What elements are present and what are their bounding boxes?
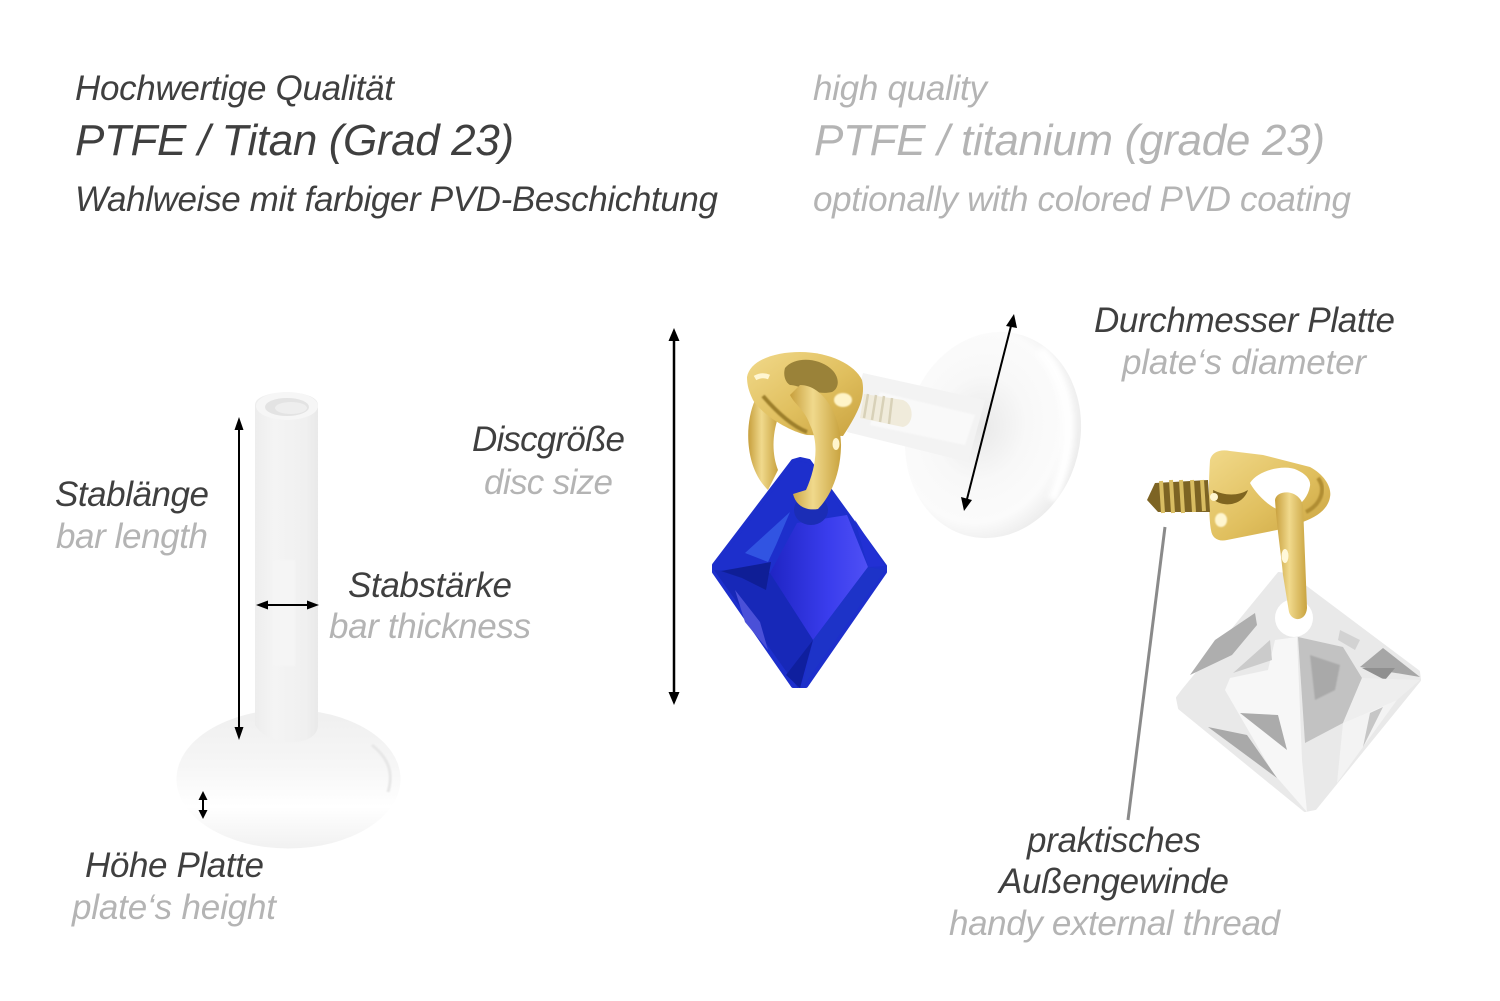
clear gem [1178, 574, 1419, 810]
label: plate diameter: Durchmesser Platte [1094, 301, 1395, 340]
label: bar thickness: Stabstärke [348, 566, 512, 605]
clear bar [847, 373, 985, 462]
label: bar length [55, 475, 209, 556]
arrow: plate diameter [961, 314, 1017, 511]
label: bar thickness: bar thickness [329, 607, 531, 646]
label: external thread: Außengewinde [997, 862, 1229, 901]
inner thread [860, 394, 912, 427]
back ring [748, 400, 778, 490]
label: external thread [949, 821, 1282, 943]
thread [1147, 480, 1210, 512]
leader line: external thread [1128, 527, 1165, 820]
heading: English: optionally with colored PVD coating [813, 180, 1352, 219]
arrow: bar thickness [256, 600, 319, 610]
label: plate height: Höhe Platte [85, 846, 264, 885]
product: assembled labret with blue gem [714, 313, 1103, 688]
disc [883, 313, 1103, 557]
link [1275, 492, 1307, 619]
arrow: disc size [668, 328, 680, 705]
label: disc size: disc size [484, 463, 613, 502]
gold head [747, 352, 863, 436]
gold head [1209, 450, 1330, 541]
product: disc base with bar [176, 392, 400, 848]
arrow: bar length [234, 417, 244, 740]
heading: German: Hochwertige Qualität [75, 69, 395, 108]
arrow: plate height [198, 791, 208, 819]
label: disc size [472, 420, 625, 502]
label: external thread: handy external thread [949, 904, 1282, 943]
label: bar length: bar length [56, 517, 208, 556]
product: attachment with clear gem and external thread [1147, 450, 1420, 812]
label: plate diameter [1094, 301, 1395, 382]
heading: English: PTFE / titanium (grade 23) [814, 116, 1325, 165]
heading: German [75, 69, 719, 219]
heading: English: high quality [813, 69, 990, 108]
label: disc size: Discgröße [472, 420, 625, 459]
label: external thread: praktisches [1026, 821, 1201, 860]
label: plate height: plate‘s height [71, 888, 277, 927]
label: plate height [71, 846, 277, 927]
label: bar thickness [329, 566, 531, 646]
blue gem [714, 459, 885, 686]
heading: German: PTFE / Titan (Grad 23) [75, 116, 514, 165]
heading: English [813, 69, 1352, 219]
label: plate diameter: plate‘s diameter [1121, 343, 1367, 382]
heading: German: Wahlweise mit farbiger PVD-Beschichtung [75, 180, 719, 219]
front ring [790, 385, 841, 509]
label: bar length: Stablänge [55, 475, 209, 514]
